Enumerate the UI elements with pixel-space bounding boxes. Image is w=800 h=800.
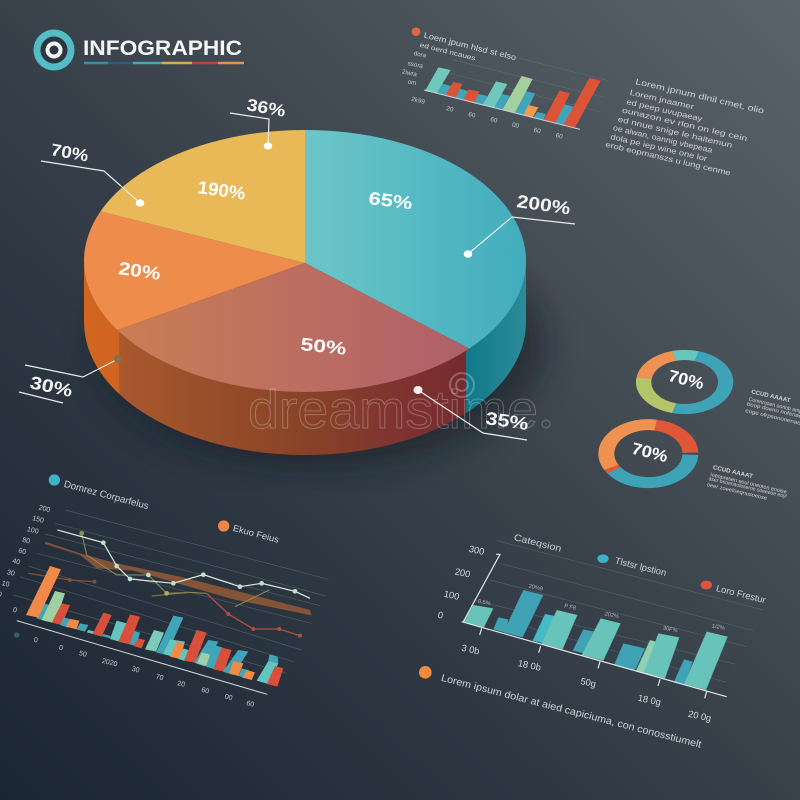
bar value labels: 20%9 [528,584,543,593]
bars [26,566,283,687]
callout: 70%: 70% [49,140,90,166]
bottom left combo chart [0,474,328,709]
y axis labels: 40 [12,558,21,567]
bars [463,590,728,690]
chart heading: Loem jpum hlsd st elso [423,31,518,62]
callouts [19,95,575,440]
x axis labels: 30 [131,666,140,675]
donut 2 caption: CCUD AAAAT [712,465,754,480]
x axis labels: 50g [580,676,597,689]
y axis labels: 80 [22,537,31,546]
x axis labels: 20 0g [687,709,712,723]
small axis marker [14,632,19,638]
gridlines [443,53,608,112]
top right text block: Lorem jnaamer [629,88,695,112]
watermark: dreamstime [248,380,538,440]
top right text block: ed nnue snige le haitemun [617,115,733,150]
bar value labels [477,584,725,634]
pie top slices [84,130,526,392]
donut 2 caption: aser beoenaoleserne soeeeoe eoyl [708,476,787,500]
bar value labels: P F8 [564,603,576,612]
x axis labels: 60 [201,687,210,696]
x axis labels: 50 [78,650,88,659]
y axis labels: 2iwra [401,68,418,79]
x axis labels: 60 [246,700,255,709]
bottom right bar chart [419,532,767,751]
callout: 36% [230,95,287,150]
callout: 35%: 35% [484,408,530,434]
chart heading: ed oerd ncaues [419,42,477,63]
y axis labels: 60 [18,547,27,556]
line series [28,530,310,636]
y axis labels: 200 [38,504,51,514]
donut 1 [633,348,736,416]
callout: 200%: 200% [515,191,572,218]
donut 1 caption: beop doeno nofenae [746,401,800,420]
top right text block: oe alwan, oannig vbepeaa [612,123,714,155]
legend: orange [218,520,281,545]
slice: yellow 190% [100,130,305,263]
brown area [45,542,312,615]
footnote text: Lorem ipsum dolar at aied capiciuma, con conosstiumelt [440,673,703,751]
slice labels: 20% [117,258,162,284]
callout: 35% [414,386,530,440]
donut 1 caption: eoge ofrpsononenae [745,408,800,427]
callout: 36%: 36% [245,95,287,121]
x axis labels: 20 [446,105,455,114]
y axis labels: 10 [1,580,10,589]
x axis labels: 00 [511,121,520,130]
donut 2 caption: oeer zoeeloeqnusoeose [706,482,768,502]
y axis labels: 30 [6,569,16,578]
x axis labels: 60 [468,111,477,120]
callout: 30%: 30% [28,372,74,401]
axes [462,554,727,698]
x axis labels [461,643,712,723]
callout: 200% [464,191,575,258]
title underline [84,62,244,64]
donut 2: 70% [630,439,670,466]
top right text block: dola pe iep wine one lor [610,132,709,163]
chart heading: Cateqsion [513,532,562,554]
y axis labels: dora [413,50,427,60]
x axis labels: 0 [58,644,64,652]
donut 1 caption [745,389,800,427]
icon: logo ring [37,33,71,67]
slice: red 50% [118,263,470,392]
x axis labels [33,637,255,709]
slice labels [117,177,414,359]
x axis labels: 0 [33,637,38,645]
pie side wall [84,261,526,455]
legend dot [412,27,420,36]
bar value labels: 1/2% [711,623,725,632]
top right text block: erob eopmanszs u lung cenme [605,140,732,177]
y axis labels [437,544,485,621]
y axis labels: ssora [407,60,424,70]
footnote dot [419,666,432,679]
gridlines [13,510,328,673]
slice labels: 65% [368,188,414,213]
x axis labels: 70 [155,673,164,682]
pie shadow [95,223,545,467]
top right text block: Lorem jpnum dlnil cmet, olio [635,76,766,116]
y axis labels: 0 [437,610,444,621]
y axis labels: 100 [26,526,39,536]
title: INFOGRAPHIC [83,37,242,60]
y axis labels: 0 [12,607,18,615]
y axis labels: 300 [468,544,485,557]
legend: red [701,581,767,605]
x axis labels: 2k99 [411,96,426,106]
bar value labels: 30F% [662,625,678,634]
bar value labels: 202% [604,611,619,620]
x axis labels: 3 0b [461,643,480,656]
donut 1 caption: CCUD AAAAT [751,389,791,404]
legend: teal: Tlstsr lpstion [614,556,667,578]
line markers [68,531,302,638]
x axis labels: 20 [177,680,186,689]
slice labels: 50% [300,334,347,359]
legend: red: Loro Frestur [715,583,767,605]
legend: teal: Domrez Corparfelus [63,479,150,512]
slice labels: 190% [196,177,247,204]
x axis labels: 00 [224,693,233,702]
donut 1: 70% [666,366,706,393]
x axis [17,621,267,694]
3D pie chart [84,130,526,455]
bar value labels: 0.5% [477,599,491,607]
slice: teal 65% [305,130,526,348]
x axis labels: 60 [555,132,564,141]
x axis labels: 60 [533,127,542,135]
top bar chart panel [401,27,608,141]
callout: 30% [19,355,122,403]
y axis labels [0,504,51,615]
y axis labels [401,50,427,87]
x axis labels: 18 0b [517,658,542,673]
top right text block: ounazon ev rlon on leg cein [621,106,748,143]
x axis labels: 18 0g [637,693,662,707]
bars [425,67,601,127]
logo and title [37,33,244,67]
x axis labels [411,96,564,141]
top right text block [605,76,766,177]
y axis labels: 100 [443,589,460,602]
callout: 70% [41,140,144,207]
x axis [424,90,580,129]
donut 2 [590,413,707,494]
legend: orange: Ekuo Feius [232,523,281,545]
gridlines [473,541,763,682]
y axis labels: 150 [32,515,45,525]
y axis labels: 200 [454,567,471,580]
donut 2 caption: Ioeopresen eoul oneoton enoise [710,472,787,496]
slice: orange 20% [84,212,305,330]
x axis labels: 2020 [101,658,118,668]
x axis labels: 60 [490,116,499,125]
top right text block: ed peep uvupaeay [626,97,703,123]
y axis labels: om [407,78,417,87]
donut 2 caption [706,465,787,502]
donut charts [590,348,800,502]
